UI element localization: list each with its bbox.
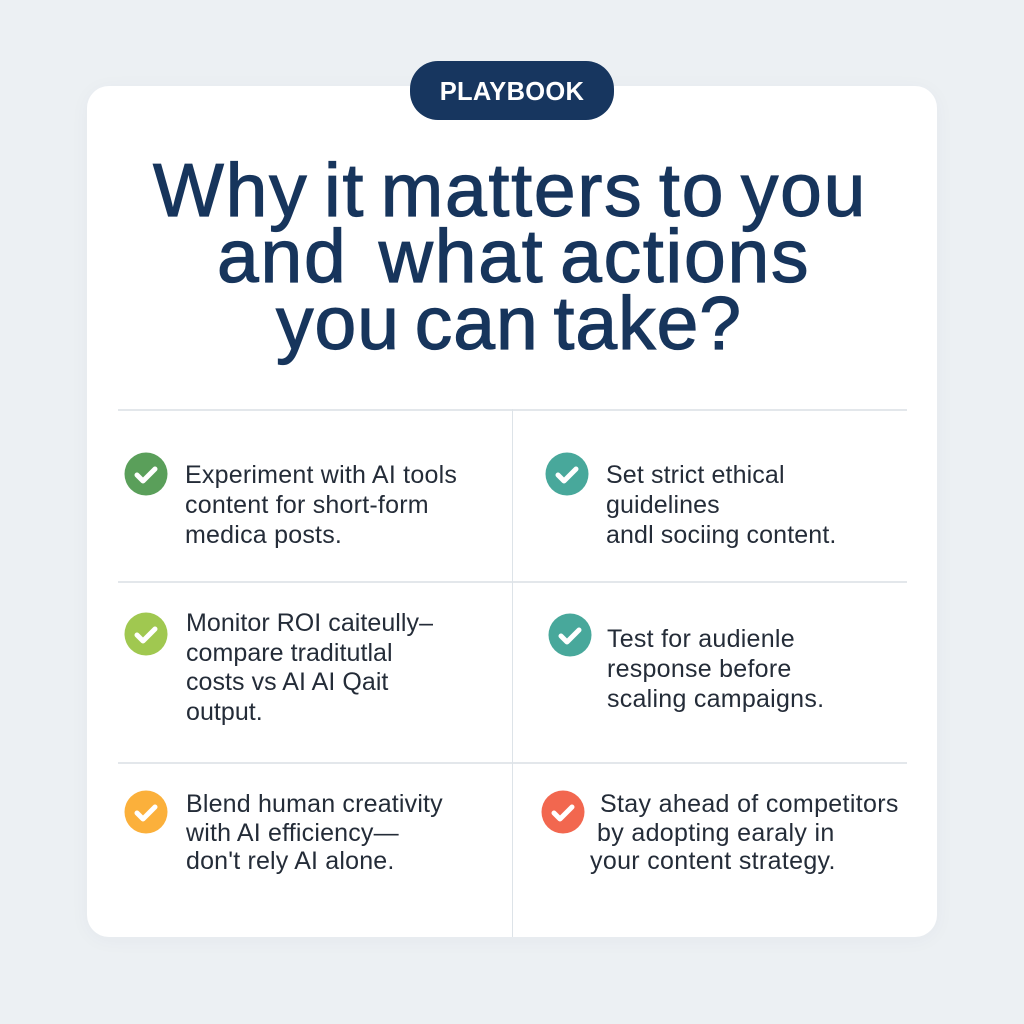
icon: teal check 2	[548, 614, 592, 656]
icon: red check	[542, 790, 584, 834]
text: ethical guidelines: andl sociing content.	[606, 521, 836, 549]
text: ethical guidelines	[606, 461, 836, 549]
title: you can take?	[276, 281, 742, 365]
icon: teal check	[546, 452, 588, 496]
icon: lime check	[124, 612, 168, 656]
title: and what actions	[217, 214, 810, 298]
text: stay ahead	[590, 790, 899, 875]
text: test audience: response before	[607, 655, 792, 683]
text: ethical guidelines: Set strict ethical	[606, 461, 785, 489]
text: blend: don't rely AI alone.	[186, 847, 395, 875]
badge: playbook: PLAYBOOK	[440, 78, 584, 106]
text: blend	[186, 790, 443, 875]
text: experiment: content for short-form	[185, 491, 429, 519]
badge: playbook	[410, 61, 614, 120]
text: test audience: scaling campaigns.	[607, 685, 824, 713]
text: monitor ROI	[186, 609, 433, 726]
text: experiment: medica posts.	[185, 521, 342, 549]
icon: amber check	[124, 790, 168, 834]
text: monitor ROI: Monitor ROI caiteully–	[186, 609, 433, 637]
icon: green check	[124, 452, 168, 496]
text: blend: with AI efficiency—	[186, 818, 399, 846]
text: stay ahead: by adopting earaly in	[597, 818, 835, 846]
text: stay ahead: your content strategy.	[590, 847, 836, 875]
text: experiment: Experiment with AI tools	[185, 461, 457, 489]
text: monitor ROI: compare traditutlal	[186, 639, 393, 667]
text: test audience	[607, 625, 824, 713]
title	[152, 148, 867, 366]
text: monitor ROI: costs vs AI AI Qait	[186, 668, 388, 696]
title: Why it matters to you	[153, 148, 867, 232]
text: experiment	[185, 461, 457, 549]
text: stay ahead: Stay ahead of competitors	[600, 790, 899, 818]
card panel	[87, 86, 937, 937]
text: blend: Blend human creativity	[186, 790, 443, 818]
text: ethical guidelines: guidelines	[606, 491, 720, 519]
text: monitor ROI: output.	[186, 698, 263, 726]
text: test audience: Test for audienle	[607, 625, 795, 653]
